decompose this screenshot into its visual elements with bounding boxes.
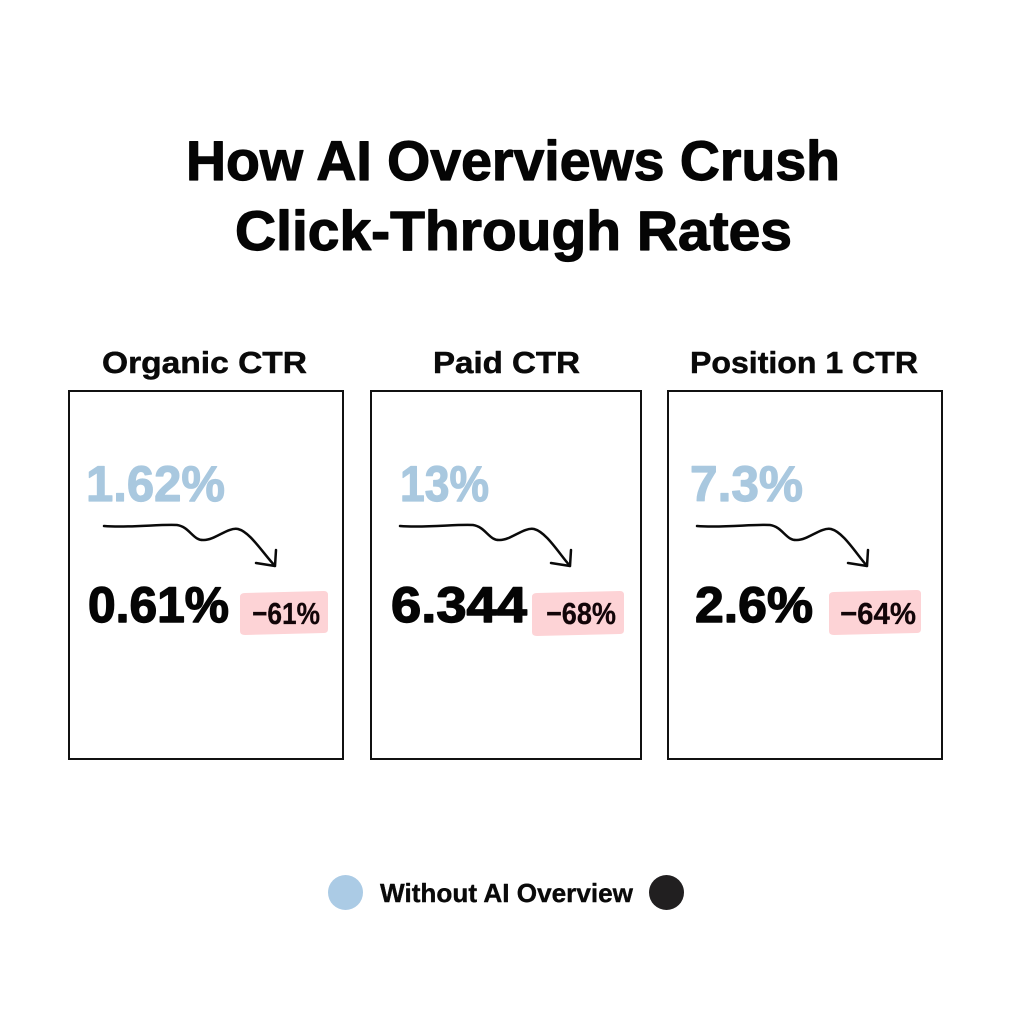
title: How AI Overviews Crush — [186, 129, 840, 192]
panel: position 1 CTR — [668, 345, 942, 759]
title — [186, 129, 840, 262]
badge: -68% — [532, 591, 624, 636]
badge: -64%: −64% — [840, 596, 916, 631]
legend swatch: black — [649, 875, 684, 910]
heading: organic CTR: Organic CTR — [102, 345, 307, 380]
panel frame: organic CTR — [69, 391, 343, 759]
panel: organic CTR — [69, 345, 343, 759]
value with AI overview: 2.6%: 2.6% — [695, 577, 813, 633]
arrow: paid decline — [400, 525, 571, 566]
badge: -68%: −68% — [546, 596, 616, 631]
heading: paid CTR: Paid CTR — [433, 345, 580, 380]
panel: paid CTR — [371, 345, 641, 759]
panel frame: paid CTR — [371, 391, 641, 759]
badge: -61% — [240, 591, 328, 635]
title: Click-Through Rates — [235, 199, 792, 262]
legend — [328, 875, 684, 910]
value without AI overview: 13%: 13% — [400, 456, 489, 512]
badge: -61%: −61% — [252, 596, 320, 631]
value with AI overview: 6.344: 6.344 — [391, 577, 527, 633]
arrow: organic decline — [104, 525, 276, 566]
panel frame: position 1 CTR — [668, 391, 942, 759]
badge: -64% — [829, 590, 921, 635]
value without AI overview: 1.62%: 1.62% — [86, 456, 225, 512]
arrow: position 1 decline — [697, 525, 868, 566]
value without AI overview: 7.3%: 7.3% — [690, 456, 803, 512]
heading: position 1 CTR: Position 1 CTR — [690, 345, 918, 380]
legend swatch: blue — [328, 875, 363, 910]
value with AI overview: 0.61%: 0.61% — [88, 577, 229, 633]
legend label: Without AI Overview — [380, 878, 634, 908]
